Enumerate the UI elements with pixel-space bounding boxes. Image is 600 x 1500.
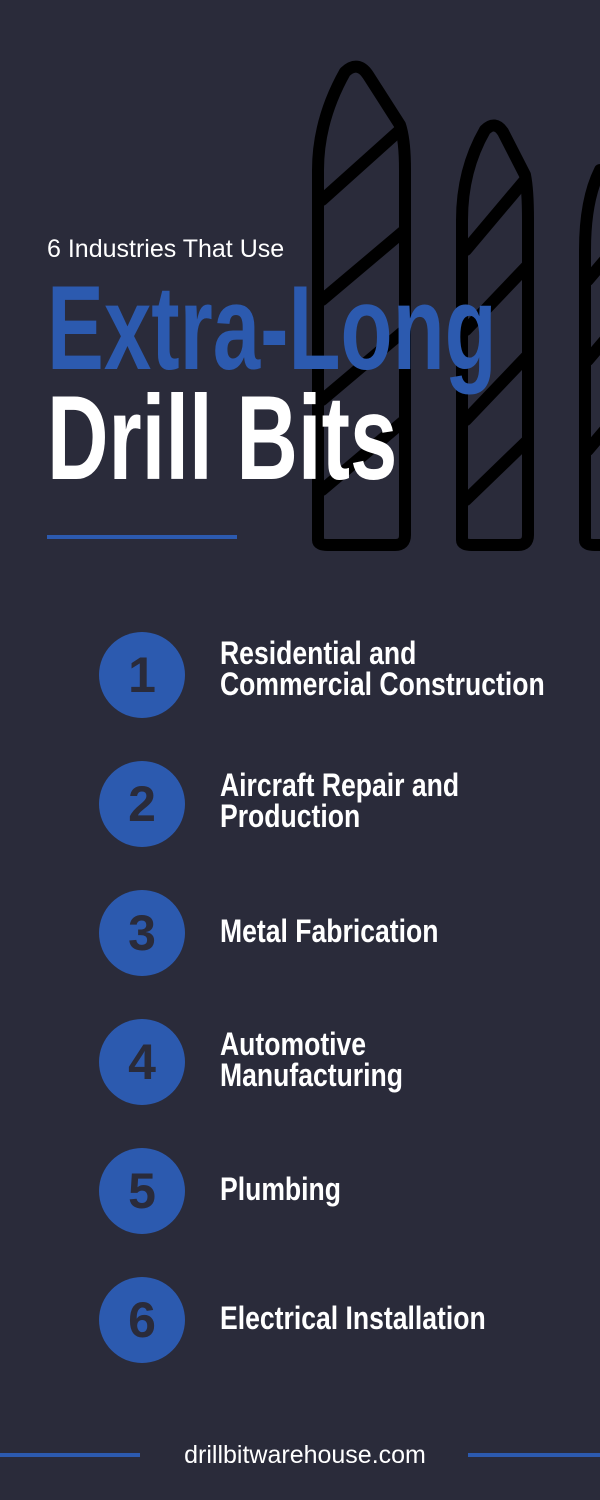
number circle 2: 2 xyxy=(128,776,156,832)
item 1 xyxy=(99,632,545,718)
label 4: Automotive xyxy=(220,1026,366,1062)
bit 1 xyxy=(318,67,405,545)
bit 3 xyxy=(585,170,600,545)
title line 1: Extra-Long xyxy=(47,261,497,395)
number circle 4 xyxy=(99,1019,185,1105)
underline xyxy=(47,535,237,539)
number circle 3: 3 xyxy=(128,905,156,961)
label 4: Manufacturing xyxy=(220,1057,403,1093)
label 2: Production xyxy=(220,798,360,834)
number circle 1: 1 xyxy=(128,647,156,703)
item 5 xyxy=(99,1148,341,1234)
number circle 5: 5 xyxy=(128,1163,156,1219)
number circle 1 xyxy=(99,632,185,718)
footer left line xyxy=(0,1453,140,1457)
label 1: Residential and xyxy=(220,635,416,671)
number circle 4: 4 xyxy=(128,1034,156,1090)
label 5: Plumbing xyxy=(220,1171,341,1207)
item 4 xyxy=(99,1019,403,1105)
number circle 2 xyxy=(99,761,185,847)
bit 2 xyxy=(462,125,528,545)
drill bit illustrations xyxy=(312,60,600,551)
label 2 xyxy=(220,767,459,834)
number circle 3 xyxy=(99,890,185,976)
title line 2: Drill Bits xyxy=(47,371,397,505)
footer website: drillbitwarehouse.com xyxy=(184,1441,426,1469)
number circle 5 xyxy=(99,1148,185,1234)
label 3: Metal Fabrication xyxy=(220,913,438,949)
number circle 6: 6 xyxy=(128,1292,156,1348)
label 1 xyxy=(220,635,545,702)
footer right line xyxy=(468,1453,600,1457)
label 1: Commercial Construction xyxy=(220,666,545,702)
number circle 6 xyxy=(99,1277,185,1363)
item 3 xyxy=(99,890,438,976)
item 6 xyxy=(99,1277,486,1363)
item 2 xyxy=(99,761,459,847)
subtitle: 6 Industries That Use xyxy=(47,235,284,263)
label 4 xyxy=(220,1026,403,1093)
label 2: Aircraft Repair and xyxy=(220,767,459,803)
label 6: Electrical Installation xyxy=(220,1300,486,1336)
